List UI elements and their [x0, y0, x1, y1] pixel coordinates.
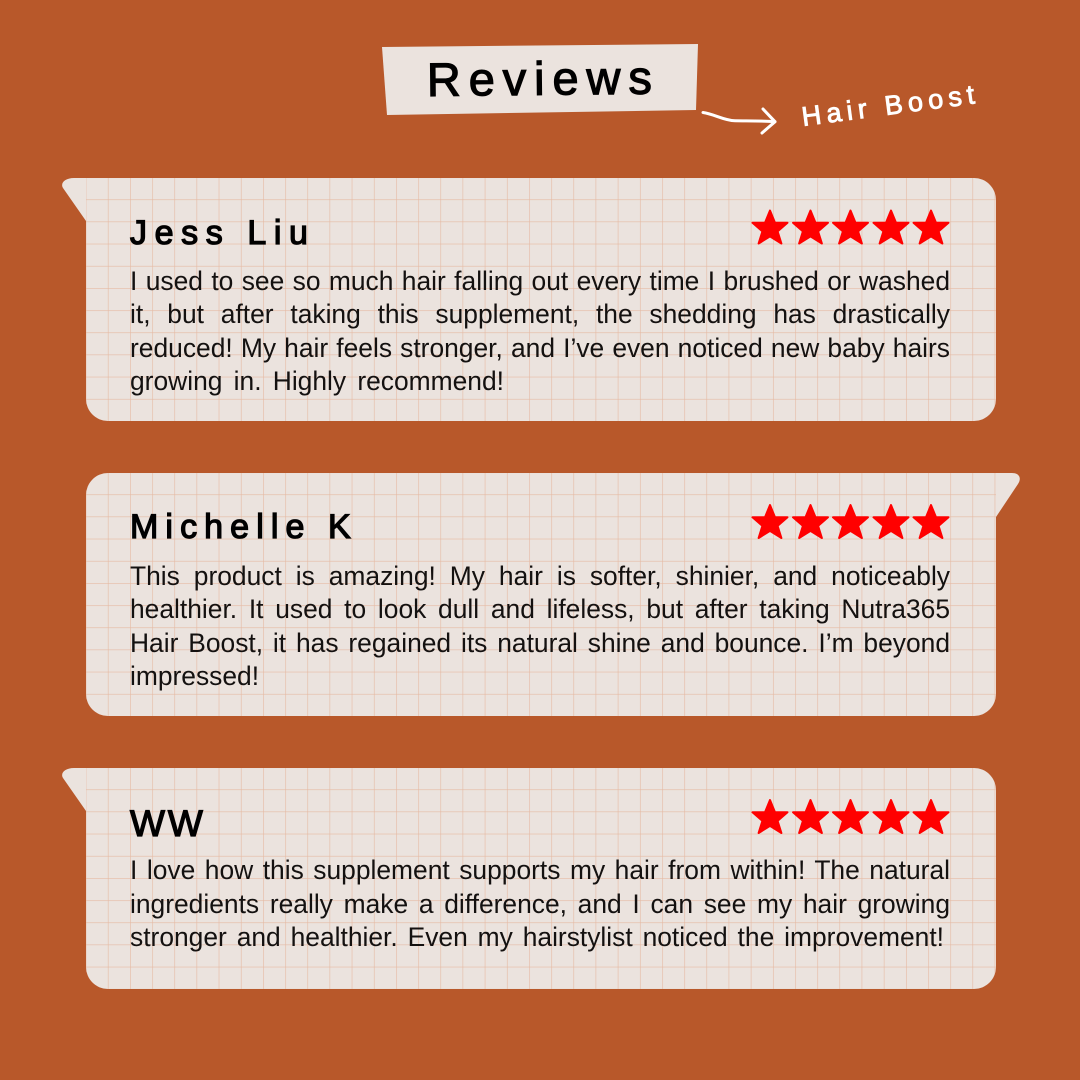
panel: review card 3 [62, 768, 996, 989]
reviewer name: Michelle K: Michelle K [130, 508, 358, 546]
review 3 body: stronger and healthier. Even my hairstylist noticed the improvement! [130, 922, 944, 952]
review 1 text [130, 214, 950, 396]
review 1 body: it, but after taking this supplement, the shedding has drastically [130, 299, 950, 329]
review 1 body: reduced! My hair feels stronger, and I’ve even noticed new baby hairs [130, 332, 950, 362]
review 2 text [130, 508, 950, 691]
reviewer name: Jess Liu: Jess Liu [130, 214, 316, 252]
review 2 body: This product is amazing! My hair is softer, shinier, and noticeably [130, 560, 950, 590]
review 3 body: ingredients really make a difference, and I can see my hair growing [130, 888, 950, 918]
rating: card 2 five stars [752, 505, 948, 538]
review 2 body: Hair Boost, it has regained its natural shine and bounce. I’m beyond [130, 628, 950, 658]
panel: review card 1 [62, 178, 996, 421]
review 1 body [130, 266, 950, 396]
review 3 body [130, 855, 950, 952]
arrow [703, 109, 775, 133]
subtitle: Hair Boost: Hair Boost [800, 79, 977, 132]
rating: card 3 five stars [752, 800, 948, 833]
panel: review card 2 [86, 473, 1020, 716]
review 3 body: I love how this supplement supports my hair from within! The natural [130, 855, 950, 885]
review 1 body: growing in. Highly recommend! [130, 366, 504, 396]
title panel [382, 44, 698, 115]
title: Reviews [427, 51, 652, 106]
review 2 body [130, 560, 950, 691]
reviewer name: WW: WW [130, 803, 206, 844]
review 2 body: healthier. It used to look dull and lifeless, but after taking Nutra365 [130, 594, 950, 624]
review 1 body: I used to see so much hair falling out every time I brushed or washed [130, 266, 950, 296]
rating: card 1 five stars [752, 210, 948, 244]
review 2 body: impressed! [130, 661, 259, 691]
